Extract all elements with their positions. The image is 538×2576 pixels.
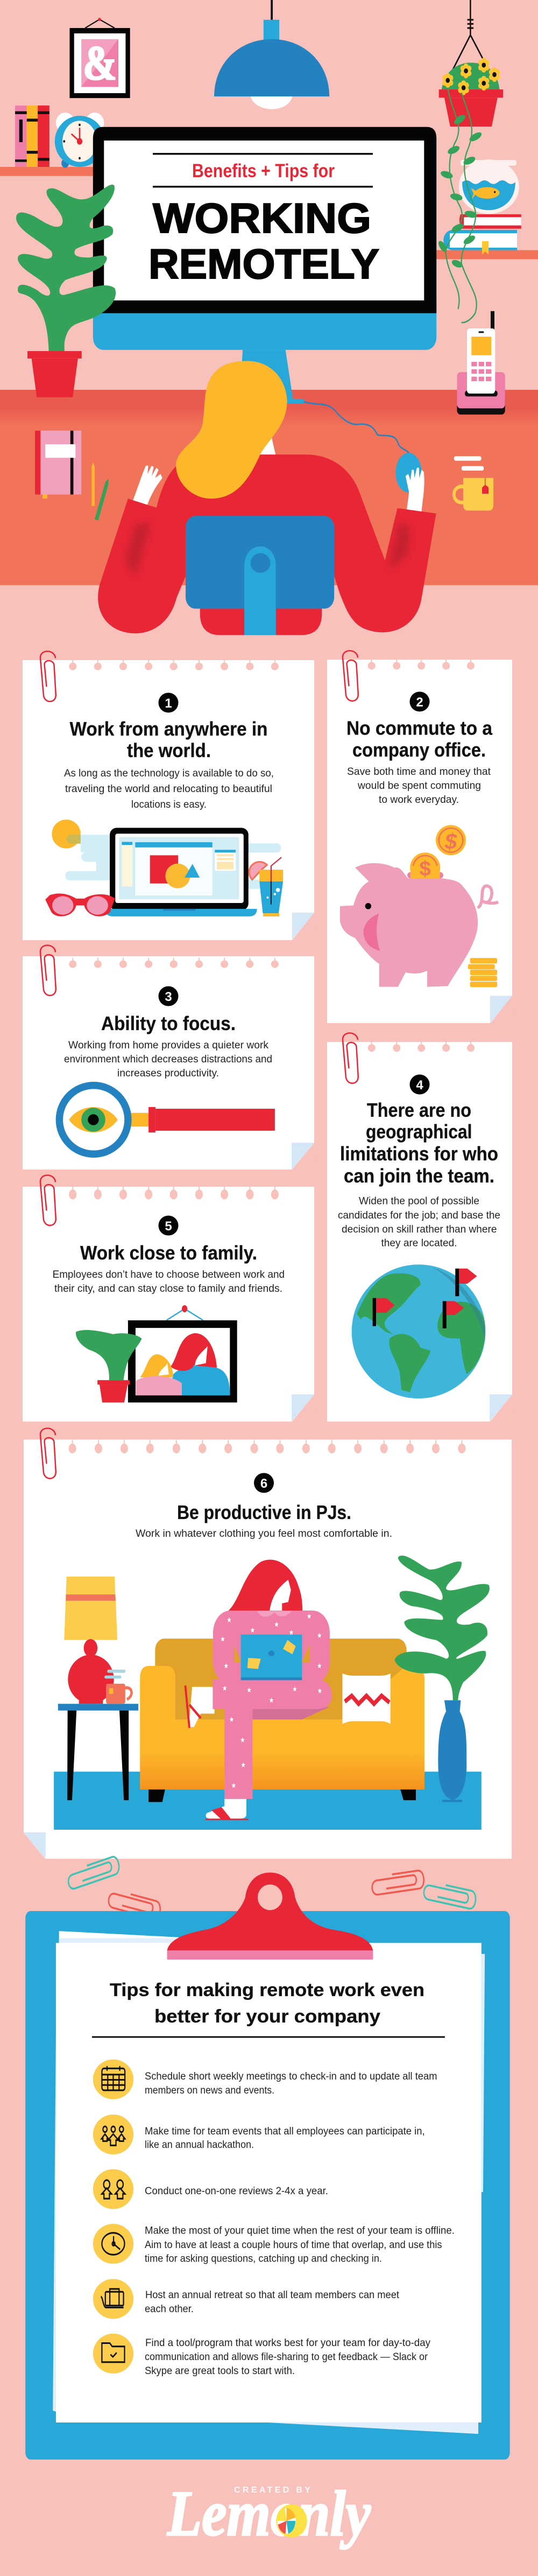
heading: Work close to family.	[80, 1242, 257, 1264]
fish bowl on books	[443, 159, 521, 255]
body text: increases productivity.	[117, 1067, 219, 1079]
tip 4	[145, 2225, 455, 2265]
panel: card 1	[23, 651, 315, 941]
body text: Widen the pool of possible	[359, 1195, 479, 1207]
tip 4: Make the most of your quiet time when the rest of your team is offline.	[145, 2225, 455, 2237]
icon: framed ampersand	[69, 18, 130, 98]
shelf left	[0, 167, 103, 176]
icon: suitcase	[93, 2279, 133, 2319]
page fold	[23, 1832, 46, 1859]
icon: cordless phone	[457, 311, 505, 415]
body text	[347, 766, 491, 806]
panel: card 3	[23, 945, 315, 1170]
body text: decision on skill rather than where	[342, 1223, 497, 1235]
tip 6: Find a tool/program that works best for your team for day-to-day	[145, 2337, 430, 2349]
tip 4: Aim to have at least a couple hours of time that overlap, and use this	[145, 2239, 442, 2251]
panel: card 6	[23, 1428, 512, 1859]
icon: folder	[93, 2334, 133, 2374]
chair	[186, 516, 334, 635]
lamp	[214, 0, 329, 109]
shelf right	[436, 250, 538, 259]
number 6	[254, 1473, 274, 1493]
panel: card 2	[327, 650, 513, 1024]
heading: There are no	[367, 1099, 471, 1121]
heading: No commute to a	[346, 717, 493, 739]
tips heading: better for your company	[154, 2006, 380, 2027]
tip 2: Make time for team events that all employees can participate in,	[145, 2126, 425, 2137]
illustration: piggy bank: $	[420, 857, 431, 880]
title block: WORKING	[153, 194, 371, 242]
body text: locations is easy.	[131, 799, 207, 810]
punch holes	[368, 1041, 475, 1052]
number 4	[410, 1075, 429, 1094]
heading: company office.	[352, 739, 486, 761]
heading: limitations for who	[340, 1143, 498, 1165]
punch holes	[69, 660, 279, 670]
page fold	[292, 1143, 315, 1170]
body text: Working from home provides a quieter work	[68, 1039, 268, 1051]
clip	[343, 650, 358, 701]
illustration: magnifier and eye	[59, 1086, 275, 1154]
illustration: piggy bank	[340, 825, 498, 987]
tip 2: like an annual hackathon.	[145, 2139, 254, 2151]
icon: alarm clock	[55, 113, 105, 167]
heading: the world.	[127, 739, 211, 761]
body text: candidates for the job; and base the	[338, 1209, 500, 1221]
woman in pajamas with laptop	[185, 1560, 332, 1819]
clip	[40, 1428, 56, 1479]
number 6: 6	[260, 1476, 267, 1491]
body text: Employees don’t have to choose between work and	[53, 1269, 285, 1280]
body text: environment which decreases distractions and	[64, 1053, 272, 1065]
tip 1: Schedule short weekly meetings to check-in and to update all team	[145, 2071, 437, 2082]
punch holes	[368, 659, 475, 669]
tip 1	[145, 2071, 437, 2096]
panel: card 4	[327, 1033, 513, 1422]
tip 1: members on news and events.	[145, 2085, 274, 2096]
title block	[148, 153, 379, 288]
body text: to work everyday.	[379, 794, 459, 806]
punch holes	[69, 957, 279, 968]
punch holes	[69, 1440, 465, 1453]
loose paper clips	[67, 1855, 477, 1920]
tip 3: Conduct one-on-one reviews 2-4x a year.	[145, 2186, 328, 2197]
body text: traveling the world and relocating to beautiful	[65, 783, 272, 795]
footer: created by Lemonly: CREATED BY	[234, 2486, 310, 2495]
side table with lamp and mug	[58, 1577, 138, 1800]
illustration: piggy bank: $	[420, 857, 431, 880]
hanging plant	[439, 0, 503, 127]
body text	[53, 1269, 285, 1294]
illustration: piggy bank: $	[444, 829, 458, 853]
number 2: 2	[416, 695, 423, 710]
icon: pencils	[91, 463, 109, 521]
rug	[54, 1772, 482, 1830]
vines	[437, 89, 483, 323]
heading: Work from anywhere in	[70, 718, 268, 740]
page fold	[490, 996, 513, 1024]
paper	[56, 1943, 482, 2423]
tip 2	[145, 2126, 425, 2151]
sofa	[140, 1639, 424, 1802]
icon: clock	[93, 2224, 133, 2264]
number 5: 5	[165, 1219, 172, 1234]
plant in blue vase	[394, 1556, 490, 1802]
cord	[303, 402, 409, 453]
clip	[40, 945, 56, 996]
icon: calendar	[93, 2060, 133, 2099]
tip 6: Skype are great tools to start with.	[145, 2365, 295, 2377]
tip 5: each other.	[145, 2304, 194, 2315]
illustration: laptop, sunglasses and drink	[45, 820, 283, 916]
heading: can join the team.	[344, 1165, 494, 1187]
icon: notebook	[35, 431, 81, 499]
title block: REMOTELY	[148, 240, 379, 288]
body text: As long as the technology is available to do so,	[64, 767, 274, 779]
panel: card 5	[23, 1175, 315, 1422]
clipboard board	[25, 1911, 510, 2460]
number 3: 3	[165, 990, 172, 1004]
heading	[70, 718, 268, 761]
heading: geographical	[366, 1121, 472, 1143]
icon: team	[93, 2115, 133, 2154]
body text: Save both time and money that	[347, 766, 491, 778]
body text	[64, 767, 274, 810]
tip 5: Host an annual retreat so that all team members can meet	[145, 2290, 400, 2301]
illustration: globe with flags	[352, 1264, 485, 1398]
page fold	[490, 1395, 513, 1422]
tips heading: Tips for making remote work even	[110, 1980, 424, 2000]
clip	[40, 651, 56, 702]
body text: their city, and can stay close to family and friends.	[54, 1283, 282, 1294]
heading	[346, 717, 493, 761]
body text: they are located.	[381, 1237, 457, 1249]
icon: two people	[93, 2169, 133, 2209]
illustration: family picture and plant	[76, 1305, 237, 1403]
tip 6: communication and allows file-sharing to get feedback — Slack or	[145, 2351, 428, 2363]
plant left	[16, 185, 116, 397]
number 1: 1	[165, 696, 172, 711]
tip 4: time for asking questions, catching up and checking in.	[145, 2253, 382, 2265]
page fold	[292, 1395, 315, 1422]
footer: created by Lemonly: Lemonly	[167, 2477, 371, 2549]
clip	[343, 1033, 358, 1083]
monitor	[93, 127, 436, 404]
heading: Be productive in PJs.	[177, 1501, 351, 1523]
woman seen from behind	[98, 361, 436, 635]
icon: books	[15, 106, 49, 167]
body text: Work in whatever clothing you feel most comfortable in.	[136, 1528, 392, 1539]
tip 6	[145, 2337, 430, 2377]
title block: Benefits + Tips for	[192, 160, 335, 181]
tips section	[25, 1855, 510, 2460]
number 2	[410, 691, 429, 712]
tips heading	[92, 1980, 445, 2038]
punch holes	[69, 1186, 279, 1199]
page fold	[292, 913, 315, 941]
icon: mouse	[395, 453, 422, 493]
body text	[64, 1039, 272, 1079]
heading: Ability to focus.	[101, 1012, 236, 1034]
icon: framed ampersand: &	[83, 36, 117, 89]
back sheets	[53, 1931, 485, 2434]
number 1	[158, 692, 179, 713]
hero illustration	[0, 0, 538, 635]
desk	[0, 390, 538, 585]
icon: tea mug	[454, 456, 493, 510]
heading	[340, 1099, 498, 1187]
body text	[338, 1195, 500, 1249]
icon: lemon	[276, 2504, 307, 2538]
body text: would be spent commuting	[357, 780, 481, 792]
tip 5	[145, 2290, 400, 2315]
number 5	[158, 1216, 179, 1235]
clip	[40, 1175, 56, 1226]
clipboard clip	[167, 1873, 373, 1959]
number 4: 4	[416, 1078, 423, 1093]
number 3	[158, 986, 179, 1006]
